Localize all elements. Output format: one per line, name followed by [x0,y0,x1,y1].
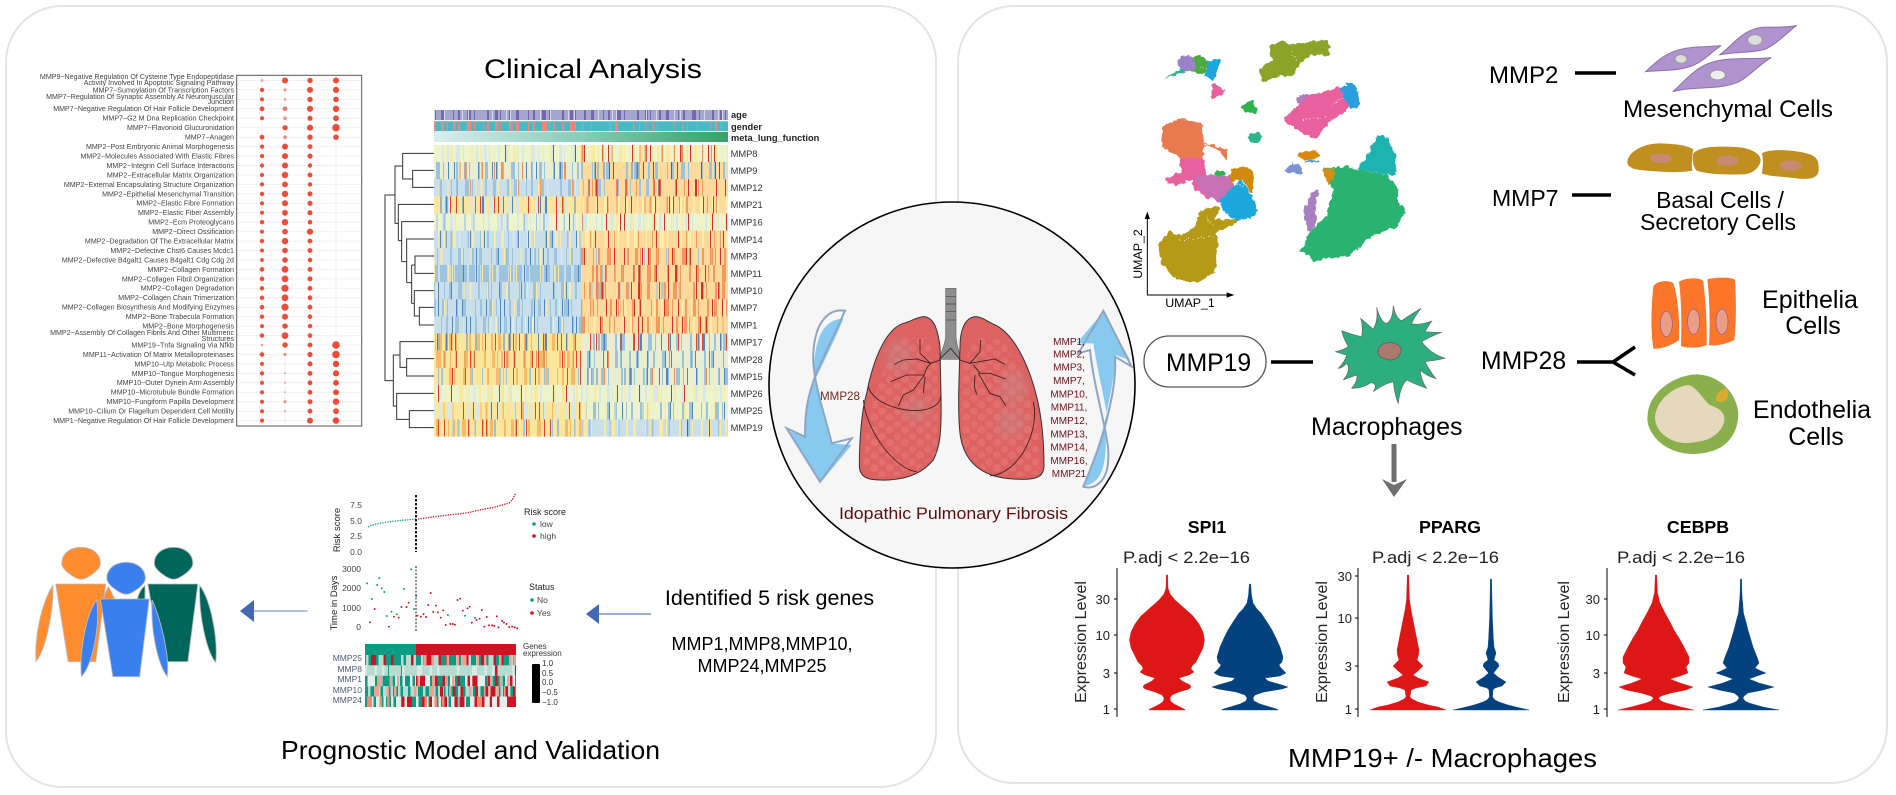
gene labels: MMP28 [731,355,763,365]
list: upregulated MMPs: MMP13, [1050,429,1088,440]
chart: risk gene mini heatmap: 0.5 [542,669,554,678]
chart: SPI1 violin: 1 [1103,702,1110,717]
right lung [959,317,1044,479]
annotation bar: meta lung function [434,132,728,142]
chart: PPARG violin: 30 [1338,569,1352,584]
icon: group of patients [36,547,216,677]
heading: MMP19+/- Macrophages: MMP19+ /- Macrophages [1288,743,1597,773]
pathway labels: MMP2−Bone Trabecula Formation [126,313,234,321]
icon: endothelial cell [1647,374,1738,454]
gene labels: MMP7 [731,303,757,313]
chart: SPI1 violin: P.adj < 2.2e−16 [1123,548,1250,567]
chart: survival time scatter: No [537,595,548,605]
chart: CEBPB violin: 3 [1593,666,1600,681]
icon: epithelial cells [1651,278,1736,349]
pathway labels: MMP2−Elastic Fibre Formation [136,200,234,208]
chart: CEBPB violin: P.adj < 2.2e−16 [1617,548,1745,567]
UMAP axis arrowheads [1145,212,1234,298]
icon: macrophage [1336,306,1445,403]
pathway labels: MMP2−Direct Ossification [152,228,234,236]
callout: MMP19 pill: MMP19 [1166,350,1251,377]
pathway labels [40,73,235,425]
chart: PPARG violin: 3 [1345,659,1352,674]
annotation bar: age [434,110,728,120]
pathway labels: MMP7−Regulation Of Synaptic Assembly At Neuromuscular [46,93,235,101]
chart: risk gene mini heatmap: expression [523,649,562,658]
chart: CEBPB violin [1556,517,1779,717]
arrow: up-regulated [1077,311,1132,487]
row: MMP28 epithelia and endothelia: Epithelia [1762,286,1858,314]
label: Idopathic Pulmonary Fibrosis: Idopathic Pulmonary Fibrosis [839,505,1068,523]
gene labels: MMP9 [731,166,757,176]
chart: risk gene mini heatmap: MMP10 [333,685,362,695]
chart: risk score plot: 5.0 [350,516,362,526]
chart: gene expression heatmap with dendrogram [385,110,820,433]
pathway labels: MMP2−Ecm Proteoglycans [148,219,234,227]
pathway labels: MMP2−Defective B4galt1 Causes B4galt1 Cdg Cdg 2d [62,256,234,264]
pathway labels: MMP2−Collagen Degradation [141,285,234,293]
chart: PPARG violin: 1 [1345,702,1352,717]
chart: risk score plot: Risk score [332,508,343,552]
chart: risk gene mini heatmap: MMP24 [333,695,362,705]
pathway labels: MMP7−Flavonoid Glucuronidation [127,124,234,132]
trachea [940,288,960,359]
gene labels: MMP8 [731,149,757,159]
heading: Clinical Analysis: Clinical Analysis [484,54,702,84]
gene labels: MMP25 [731,406,763,416]
left lung [859,317,941,480]
list: upregulated MMPs: MMP10, [1050,389,1088,400]
row: MMP28 epithelia and endothelia: Endothelia [1753,396,1871,424]
chart: risk gene mini heatmap: Genes [523,642,547,651]
chart: CEBPB violin: Expression Level [1556,581,1573,703]
gene labels: MMP14 [731,235,763,245]
row: MMP28 epithelia and endothelia: Cells [1788,423,1844,451]
gene labels: MMP11 [731,269,762,279]
chart: survival time scatter: Status [529,582,555,592]
chart: risk gene mini heatmap: 1.0 [542,659,554,668]
pathway labels: Activity Involved In Apoptotic Signaling Pathway [84,79,234,87]
annotation labels: meta_lung_function [731,133,820,143]
label: UMAP axes: UMAP_2 [1131,229,1145,279]
annotation bar: gender [434,121,728,131]
heading: Prognostic Model and Validation: Prognostic Model and Validation [281,735,660,765]
pathway labels: Junction [208,98,234,106]
list: upregulated MMPs: MMP21 [1052,469,1087,480]
chart: risk gene mini heatmap: 0.0 [542,678,554,687]
gene labels [731,149,763,433]
pathway labels: MMP11−Activation Of Matrix Metalloproteinases [83,351,234,359]
list: upregulated MMPs: MMP1, [1053,337,1085,348]
text: identified risk genes [665,586,874,676]
list: upregulated MMPs: MMP12, [1050,416,1088,427]
row: MMP2 mesenchymal cells: Mesenchymal Cells [1623,96,1833,123]
arrow: genes to model [586,604,651,624]
pathway labels: MMP2−Collagen Fibril Organization [122,275,234,283]
chart: UMAP clusters [1145,43,1403,298]
annotation labels [731,110,820,143]
row: MMP7 basal and secretory cells: MMP7 [1492,185,1558,211]
pathway labels: MMP2−Bone Morphogenesis [142,322,234,330]
gene labels: MMP3 [731,252,757,262]
connector: MMP19 to macrophage [1271,360,1313,364]
chart: risk gene mini heatmap [333,642,562,707]
chart: risk gene mini heatmap: MMP8 [337,664,362,674]
chart: enrichment bubble plot [40,73,362,426]
pathway labels: MMP10−Utp Metabolic Process [134,360,234,368]
pathway labels: MMP7−Anagen [185,134,234,142]
list: upregulated MMPs: MMP16, [1050,456,1088,467]
panel: single cell analysis [958,6,1887,783]
pathway labels: MMP7−Sumoylation Of Transcription Factors [93,86,234,94]
pathway labels: MMP2−Epithelial Mesenchymal Transition [102,190,234,198]
chart: risk gene mini heatmap: MMP25 [333,653,362,663]
chart: risk score plot: low [540,519,554,529]
callout: MMP19 pill [1144,336,1266,387]
pathway labels: MMP2−External Encapsulating Structure Organization [64,181,234,189]
chart: SPI1 violin: 30 [1096,592,1110,607]
label: Macrophages: Macrophages [1311,413,1462,441]
bubbles [260,78,340,424]
circle: idiopathic pulmonary fibrosis [769,202,1135,568]
gene labels: MMP21 [731,200,763,210]
clusters [1161,43,1403,281]
row: MMP2 mesenchymal cells: MMP2 [1489,62,1558,89]
row: MMP7 basal and secretory cells [1492,143,1819,235]
chart: CEBPB violin: 30 [1586,592,1600,607]
icon: mesenchymal cells [1646,25,1797,92]
pathway labels: MMP2−Assembly Of Collagen Fibrils And Other Multimeric [50,329,234,337]
panel: clinical analysis and prognostic model [6,6,936,787]
chart: SPI1 violin: SPI1 [1188,517,1226,537]
chart: survival time scatter: Time in Days [329,575,340,631]
list: upregulated MMPs: MMP2, [1053,349,1085,360]
pathway labels: MMP10−Cilium Or Flagellum Dependent Cell Motility [68,408,234,416]
chart: survival time scatter: Yes [537,608,551,618]
pathway labels: MMP2−Molecules Associated With Elastic Fibres [80,152,234,160]
pathway labels: MMP2−Defective Chst6 Causes Mcdc1 [110,247,234,255]
text: identified risk genes: Identified 5 risk genes [665,586,874,610]
chart: SPI1 violin: 10 [1096,628,1110,643]
chart: CEBPB violin: CEBPB [1667,517,1729,537]
pathway labels: MMP2−Collagen Chain Trimerization [118,294,234,302]
pathway labels: MMP10−Outer Dynein Arm Assembly [117,379,234,387]
chart: risk gene mini heatmap: −1.0 [542,698,558,707]
pathway labels: MMP7−Negative Regulation Of Hair Follicle Development [53,105,234,113]
row: MMP2 mesenchymal cells [1489,25,1833,123]
icon: basal cells [1627,143,1819,179]
chart: survival time scatter [329,564,555,632]
chart: risk score plot: Risk score [524,507,566,517]
arrow: down-regulated [787,310,852,483]
pathway labels: MMP2−Integrin Cell Surface Interactions [106,162,234,170]
label: UMAP axes: UMAP_1 [1165,296,1215,310]
pathway labels: MMP2−Post Embryonic Animal Morphogenesis [86,143,234,151]
pathway labels: MMP7−G2 M Dna Replication Checkpoint [102,115,234,123]
pathway labels: MMP10−Microtubule Bundle Formation [111,389,234,397]
list: upregulated MMPs: MMP11, [1051,403,1087,414]
chart: risk score plot [332,493,566,557]
chart: survival time scatter: 0 [356,622,361,632]
chart: survival time scatter: 1000 [342,603,361,613]
dendrogram [385,153,434,428]
chart: SPI1 violin [1073,517,1288,717]
chart: survival time scatter: 2000 [342,583,361,593]
gene labels: MMP16 [731,217,763,227]
pathway labels: MMP10−Fungiform Papilla Development [106,398,234,406]
pathway labels: MMP2−Degradation Of The Extracellular Matrix [85,238,234,246]
chart: CEBPB violin: 1 [1593,702,1600,717]
label: MMP28 downregulated: MMP28 [820,390,860,403]
chart: CEBPB violin: 10 [1586,628,1600,643]
annotation labels: age [731,110,747,120]
chart: risk score plot: 2.5 [350,531,362,541]
text: identified risk genes: MMP24,MMP25 [697,656,827,676]
chart: SPI1 violin: 3 [1103,666,1110,681]
chart: PPARG violin [1314,517,1529,717]
chart: risk score plot: 7.5 [350,500,362,510]
gene labels: MMP1 [731,320,757,330]
list: upregulated MMPs [1050,337,1088,480]
heatmap stripes [434,154,728,428]
pathway labels: MMP2−Extracellular Matrix Organization [107,171,234,179]
annotation labels: gender [731,122,762,132]
chart: PPARG violin: 10 [1338,611,1352,626]
gene labels: MMP15 [731,372,763,382]
chart: PPARG violin: Expression Level [1314,581,1331,703]
pathway labels: MMP9−Negative Regulation Of Cysteine Type Endopeptidase [40,73,234,81]
chart: PPARG violin: PPARG [1419,517,1481,537]
pathway labels: MMP19−Tnfa Signaling Via Nfkb [131,341,234,349]
list: upregulated MMPs: MMP3, [1053,363,1085,374]
fissures and bronchi [863,339,1035,476]
gene labels: MMP12 [731,183,763,193]
arrow: model to patients [240,600,308,622]
chart: risk score plot: 0.0 [350,547,362,557]
mottled lung texture [863,337,1040,477]
list: upregulated MMPs: MMP7, [1053,376,1085,387]
chart: risk score plot: high [540,531,556,541]
chart: SPI1 violin: Expression Level [1073,581,1090,703]
gene labels: MMP10 [731,286,763,296]
pathway labels: MMP1−Negative Regulation Of Hair Follicle Development [53,417,234,425]
chart: risk gene mini heatmap: −0.5 [542,688,558,697]
chart: PPARG violin: P.adj < 2.2e−16 [1372,548,1499,567]
gene labels: MMP26 [731,389,763,399]
pathway labels: MMP2−Elastic Fiber Assembly [138,209,234,217]
row: MMP28 epithelia and endothelia: MMP28 [1481,348,1566,375]
gene labels: MMP19 [731,423,763,433]
chart: risk gene mini heatmap: MMP1 [337,674,362,684]
pathway labels: MMP10−Tongue Morphogenesis [132,370,234,378]
pathway labels: Structures [202,335,234,343]
gene labels: MMP17 [731,337,763,347]
row: MMP7 basal and secretory cells: Secretory Cells [1640,209,1796,235]
UMAP axes [1147,215,1232,295]
list: upregulated MMPs: MMP14, [1050,443,1088,454]
lungs illustration [787,288,1132,487]
arrow: macrophages to violin plots [1382,444,1407,497]
pathway labels: MMP2−Collagen Formation [147,266,234,274]
row: MMP7 basal and secretory cells: Basal Cells / [1656,187,1785,213]
fibrosis texture [885,340,1027,437]
chart: survival time scatter: 3000 [342,564,361,574]
pathway labels: MMP2−Collagen Biosynthesis And Modifying Enzymes [62,304,234,312]
label: UMAP axes [1131,229,1215,310]
text: identified risk genes: MMP1,MMP8,MMP10, [671,634,853,654]
row: MMP28 epithelia and endothelia: Cells [1785,312,1841,340]
row: MMP28 epithelia and endothelia [1481,278,1871,454]
